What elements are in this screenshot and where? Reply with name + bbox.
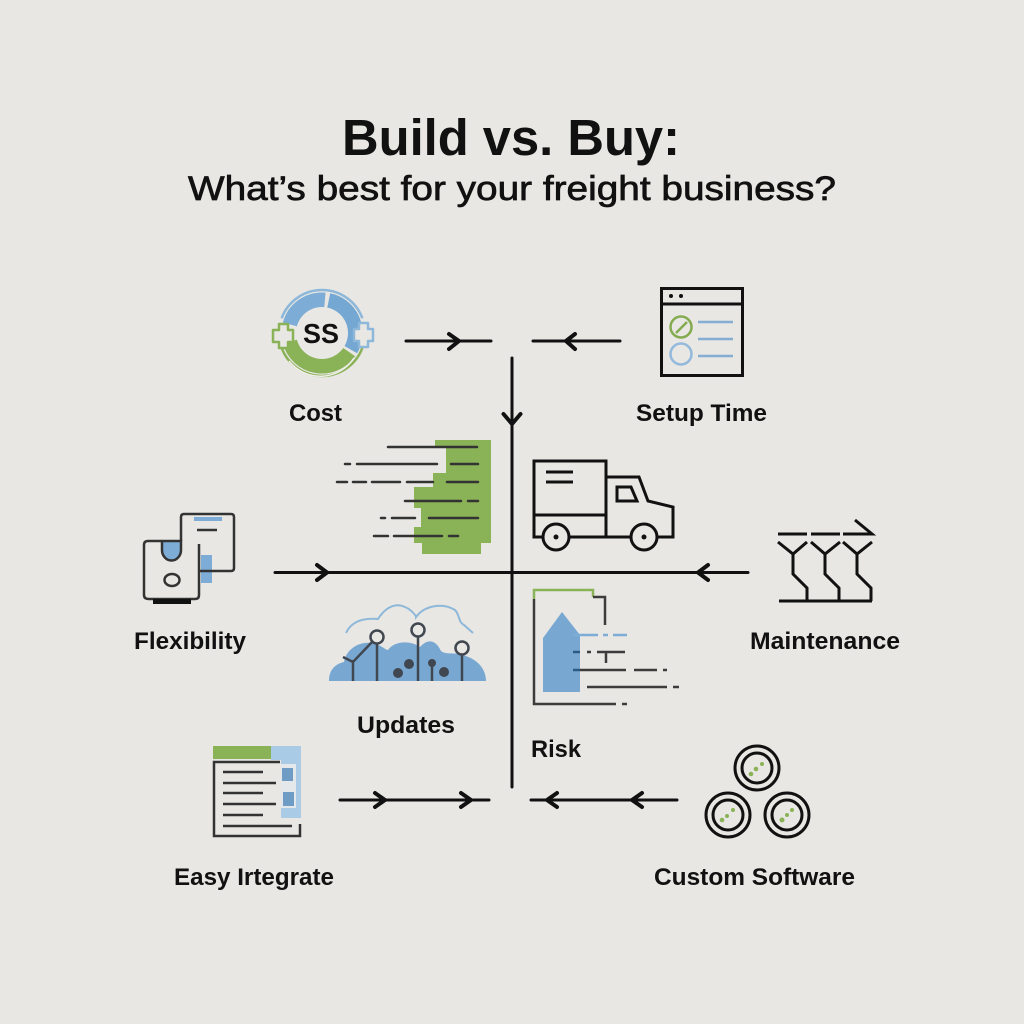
- subheading: What’s best for your freight business?: [188, 170, 836, 208]
- icon: cost: SS: [303, 318, 339, 349]
- label: Custom Software: Custom Software: [654, 864, 855, 891]
- label: Easy Irtegrate: Easy Irtegrate: [174, 864, 334, 891]
- icon: easy integrate document: [213, 746, 301, 836]
- arrow: cost to centre: [406, 334, 491, 349]
- central cross axes: [275, 358, 748, 787]
- plus right: [354, 323, 373, 347]
- label: Flexibility: Flexibility: [134, 628, 247, 655]
- label: Updates: Updates: [357, 712, 455, 739]
- arrow: custom software to centre: [531, 793, 677, 807]
- title: [188, 109, 836, 208]
- arrow: easy integrate to centre: [340, 793, 489, 807]
- label: Risk: Risk: [531, 736, 582, 763]
- icon: setup time window: [661, 288, 743, 376]
- arrow: setup time to centre: [533, 334, 620, 349]
- icon: flexibility: [144, 514, 234, 604]
- icon: maintenance: [778, 520, 872, 601]
- icon: delivery truck: [534, 461, 673, 550]
- icon: custom software discs: [706, 746, 809, 837]
- icon: risk document: [534, 590, 679, 704]
- label: Maintenance: Maintenance: [750, 628, 900, 655]
- icon: green document with speed lines: [337, 440, 491, 554]
- plus left: [273, 324, 293, 348]
- label: Setup Time: Setup Time: [636, 400, 767, 427]
- heading: Build vs. Buy: Build vs. Buy:: [342, 109, 680, 166]
- icon: updates cloud network: [329, 605, 486, 681]
- icon: cost: [273, 290, 373, 376]
- label: Cost: Cost: [289, 400, 342, 427]
